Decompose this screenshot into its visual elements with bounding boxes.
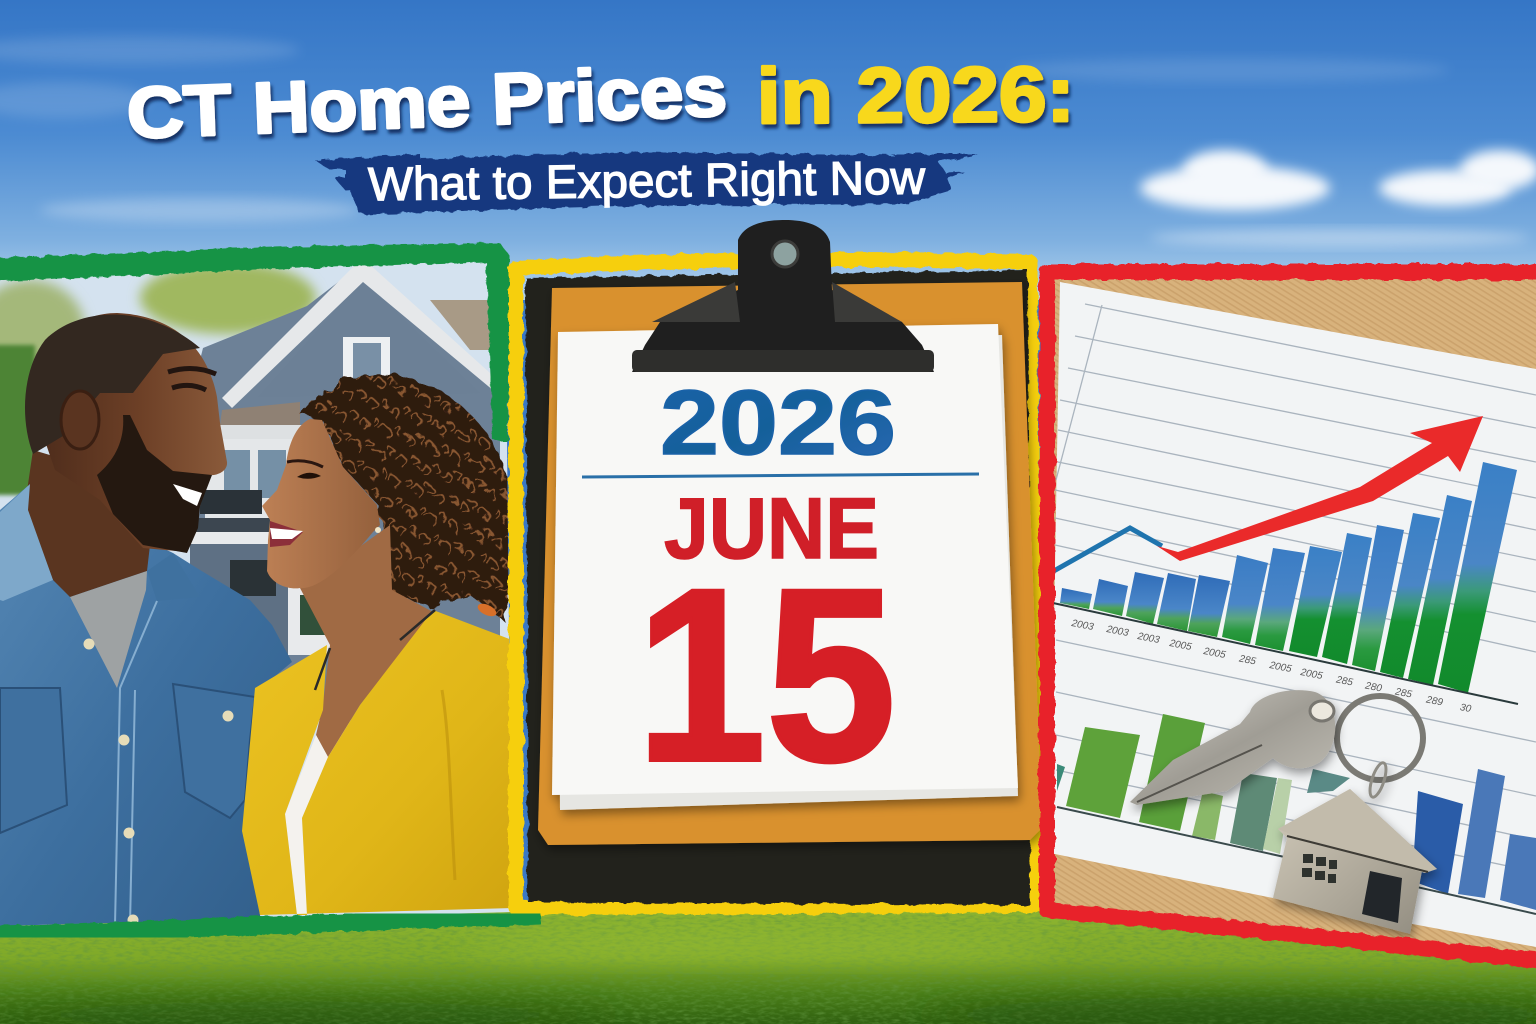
axis year labels: 30 (1459, 702, 1472, 715)
wood desk (1040, 265, 1536, 965)
axis year labels: 2003 (1136, 631, 1161, 646)
green painted border bottom (0, 915, 540, 936)
axis year labels: 2005 (1268, 660, 1293, 675)
attic window (343, 337, 390, 379)
title: in 2026: (757, 50, 1075, 140)
denim shirt (0, 484, 292, 930)
photo background (0, 250, 520, 930)
red painted border (1047, 272, 1536, 962)
year: 2026 (660, 372, 896, 474)
chart paper (1050, 282, 1536, 947)
necklace (315, 610, 435, 690)
panel: calendar clipboard (516, 220, 1042, 908)
woman (242, 375, 513, 915)
hair (25, 315, 200, 454)
key (1130, 690, 1335, 805)
pocket left (0, 688, 67, 833)
paper pad (552, 324, 1018, 810)
divider (582, 474, 979, 477)
smile (270, 521, 303, 547)
chart grid (1055, 304, 1536, 652)
yellow painted border (516, 260, 1034, 908)
ear stud (375, 527, 381, 533)
axis year labels: 280 (1363, 680, 1383, 695)
clouds (0, 36, 1536, 247)
panel: couple in front of house (0, 243, 520, 930)
sky background (0, 0, 1536, 300)
axis year labels: 2005 (1202, 646, 1227, 661)
axis year labels: 2005 (1168, 638, 1193, 653)
lower chart grid (1056, 640, 1536, 872)
man (0, 313, 292, 930)
eye (287, 461, 323, 467)
collar (0, 484, 53, 601)
axis year labels: 2005 (1299, 667, 1324, 682)
house (190, 263, 500, 720)
title: CT Home Prices (126, 51, 728, 154)
beard (97, 415, 212, 553)
yellow cardigan (242, 610, 512, 915)
axis year labels: 285 (1334, 674, 1354, 689)
gray t-shirt (70, 571, 147, 688)
month: JUNE (664, 481, 879, 577)
axis year labels: 2003 (1105, 624, 1130, 639)
placket and buttons (84, 601, 234, 926)
smile teeth (173, 484, 202, 506)
subtitle banner (315, 151, 978, 214)
lower bars (1057, 714, 1536, 914)
house keychain (1273, 761, 1437, 934)
panel: price chart with keys (1040, 265, 1536, 965)
cardigan sleeve shading (442, 690, 455, 880)
neck (300, 525, 433, 757)
head (27, 313, 227, 552)
day: 15 (636, 538, 896, 813)
green painted border (0, 243, 509, 440)
title (126, 50, 1075, 154)
orange leaf (478, 604, 496, 616)
axis year labels: 2003 (1070, 618, 1095, 633)
hair (300, 375, 513, 622)
key ring (1337, 696, 1423, 780)
axis year labels: 289 (1424, 694, 1444, 709)
neck (25, 450, 150, 597)
pocket right (173, 684, 255, 818)
trend arrow red (1157, 416, 1483, 561)
brow and eye (168, 368, 216, 390)
trend line blue (1052, 528, 1162, 572)
axis year labels: 285 (1393, 686, 1413, 701)
black board (526, 270, 1030, 905)
clip (632, 220, 934, 372)
white top (285, 735, 328, 915)
ear (61, 391, 99, 449)
subtitle text: What to Expect Right Now (368, 151, 926, 210)
banner brush stroke (315, 152, 978, 214)
face (262, 419, 380, 588)
axis year labels (1070, 618, 1472, 715)
orange clipboard (538, 282, 1042, 845)
grass lawn (0, 905, 1536, 1024)
blue bars and axis (1053, 462, 1518, 704)
axis year labels: 285 (1237, 653, 1257, 668)
